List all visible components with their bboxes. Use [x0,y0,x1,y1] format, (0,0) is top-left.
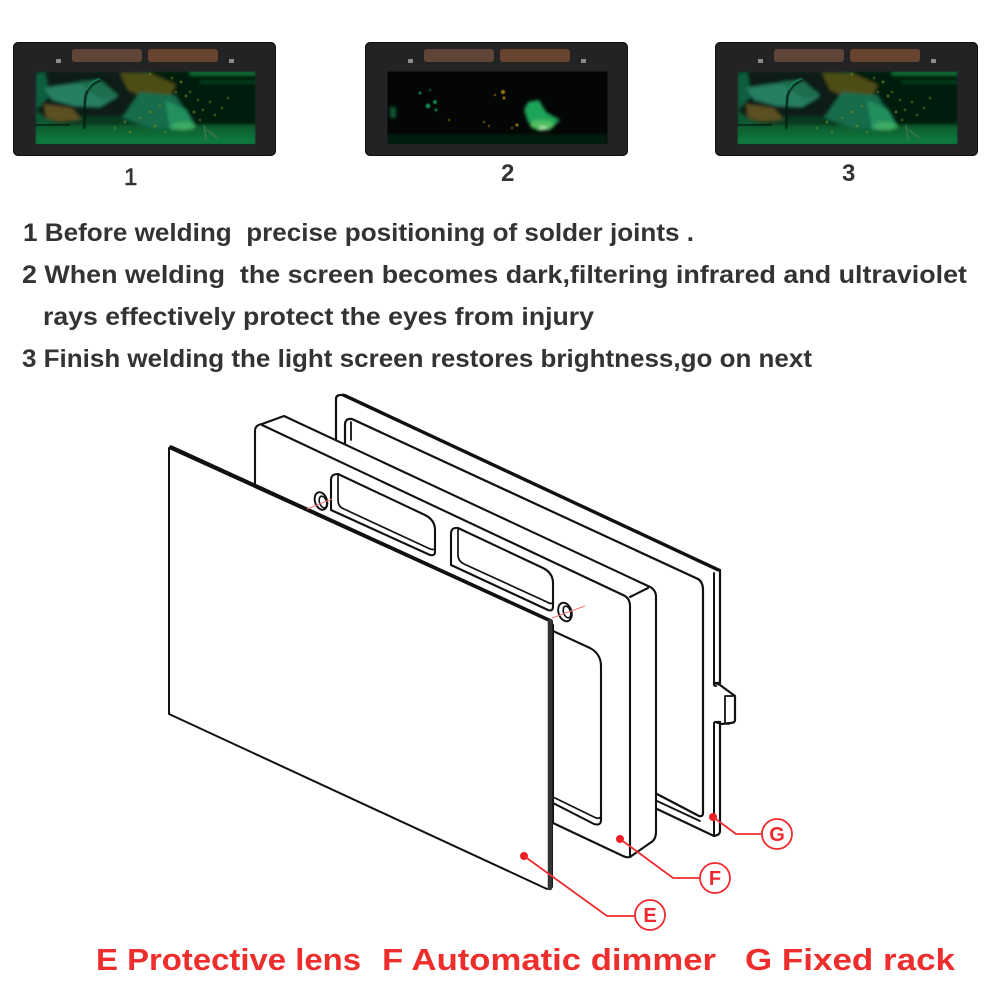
part G: fixed rack [336,395,735,836]
slot 2 [451,528,553,610]
callout F: F [709,868,721,890]
exploded diagram [169,395,735,889]
callouts [520,813,792,930]
lower window [553,631,601,824]
callout G [709,813,792,849]
step 1: 1 Before welding precise positioning of solder joints . [23,219,694,247]
legend F: F Automatic dimmer [382,942,716,977]
slot 1 [331,474,435,555]
label: number 2: 2 [501,160,514,187]
panel: screen 2 when welding [365,42,628,156]
screw holes [313,491,329,511]
panel: screen 3 after welding [715,42,978,156]
step 3: 3 Finish welding the light screen restores brightness,go on next [22,345,813,373]
text block: welding steps [22,219,968,373]
legend E: E Protective lens [96,942,361,977]
step 2 line 1: 2 When welding the screen becomes dark,filtering infrared and ultraviolet [22,261,968,289]
legend [96,942,956,977]
step 2 line 2: rays effectively protect the eyes from injury [43,303,594,331]
callout G: G [769,824,785,846]
label: number 3: 3 [842,160,855,187]
callout E: E [643,905,657,927]
callout E [520,852,665,930]
callout F [616,835,730,893]
part F: automatic dimmer [255,416,656,857]
faint red guide lines [307,499,585,618]
label: number 1: 1 [124,164,137,191]
panel: screen 1 before welding [13,42,276,156]
part E: protective lens [169,447,552,889]
legend G: G Fixed rack [745,942,956,977]
